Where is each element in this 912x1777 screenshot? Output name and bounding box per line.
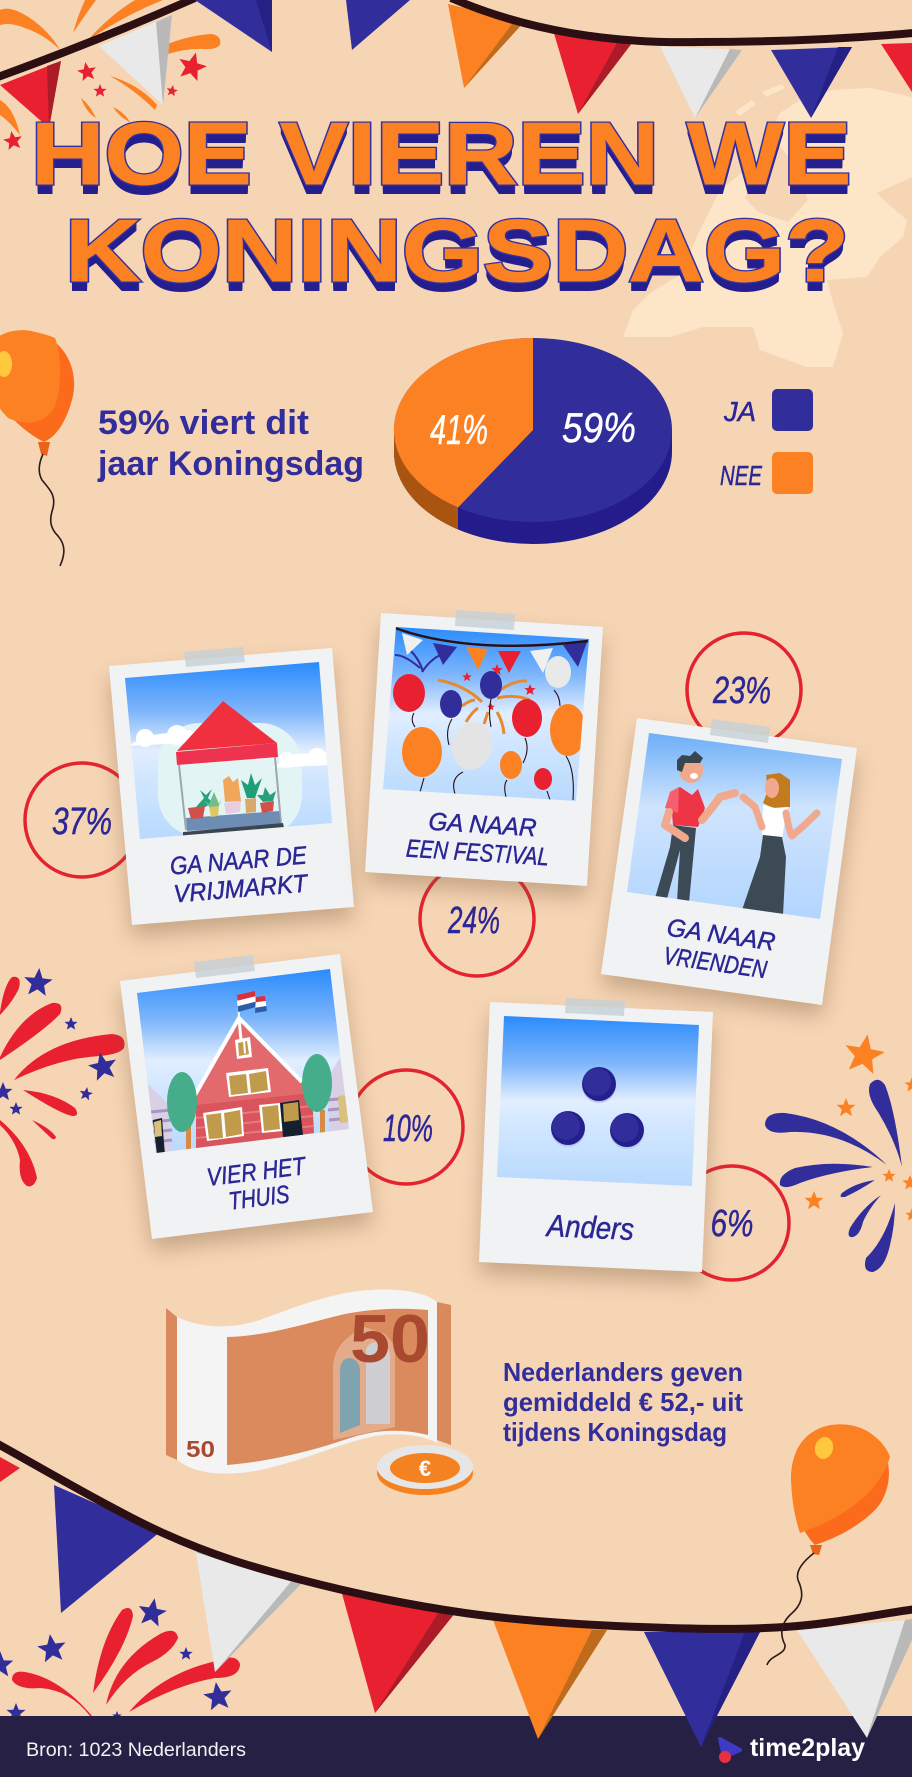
circle: 10% [349, 1070, 463, 1184]
photo: vrienden: GA NAAR [665, 914, 777, 957]
coin [377, 1445, 473, 1495]
circle: 10%: 10% [383, 1108, 433, 1150]
text: 59% viert dit: jaar Koningsdag [97, 445, 364, 483]
balloons and bunting [393, 628, 588, 800]
photo: festival: GA NAAR [428, 808, 537, 842]
circle: 23%: 23% [712, 670, 771, 712]
banknote: 50 euro [166, 1290, 451, 1474]
pie chart [394, 338, 672, 544]
coin: € [419, 1456, 431, 1481]
fireworks: top left [0, 0, 220, 151]
circle: 24% [420, 862, 534, 976]
bunting string [0, 1443, 912, 1629]
circle: 37% [25, 763, 139, 877]
two people talking [655, 751, 817, 915]
banknote: 50 euro: 50 [350, 1301, 430, 1377]
bunting: bottom [0, 1457, 912, 1747]
circle: 6%: 6% [710, 1203, 754, 1245]
circle: 24%: 24% [447, 900, 500, 942]
logo: time2play: time2play [750, 1734, 865, 1762]
title: HOE VIEREN WE [31, 104, 851, 203]
balloon string: right [767, 1553, 814, 1665]
title: KONINGSDAG? [65, 201, 849, 300]
title: KONINGSDAG? [65, 201, 849, 300]
text: 59% viert dit [97, 404, 364, 483]
circle: 37%: 37% [52, 801, 112, 843]
bunting: top [0, 0, 912, 128]
text: gemiddeld bedrag: tijdens Koningsdag [503, 1417, 727, 1447]
fireworks: bottom left [0, 1596, 240, 1721]
market stall [131, 701, 328, 836]
photo: anders: Anders [544, 1208, 635, 1247]
text: gemiddeld bedrag [503, 1357, 743, 1447]
text: gemiddeld bedrag: gemiddeld € 52,- uit [503, 1387, 743, 1417]
balloon: right [791, 1424, 890, 1555]
title: HOE VIEREN WE [31, 104, 851, 203]
three dots [551, 1067, 644, 1149]
legend: NEE [720, 460, 762, 491]
photo: vrienden: VRIENDEN [662, 942, 769, 984]
legend [720, 389, 813, 494]
photo: thuis: THUIS [227, 1180, 291, 1216]
photo: vrijmarkt: GA NAAR DE [169, 841, 308, 881]
banknote: 50 euro: 50 [186, 1436, 215, 1462]
text: 59% viert dit: 59% viert dit [98, 404, 309, 442]
photo: vrijmarkt: VRIJMARKT [172, 869, 310, 908]
fireworks: right [765, 1031, 912, 1272]
title [31, 104, 851, 300]
footer bar: Bron: 1023 Nederlanders [26, 1740, 246, 1761]
fireworks: left [0, 967, 124, 1186]
photo: festival: EEN FESTIVAL [405, 835, 550, 871]
photo: anders [479, 998, 713, 1284]
photo: festival [365, 610, 603, 898]
legend: JA [723, 396, 756, 427]
footer bar [0, 1716, 912, 1777]
map of the Netherlands [623, 84, 912, 367]
text: gemiddeld bedrag: Nederlanders geven [503, 1357, 743, 1387]
circle: 6% [675, 1166, 789, 1280]
photo: thuis [120, 954, 373, 1251]
photo: thuis: VIER HET [205, 1152, 308, 1192]
circle: 23% [687, 633, 801, 747]
balloon: left [0, 330, 74, 566]
pie chart: 59% [562, 404, 636, 451]
photo: vrijmarkt [109, 647, 354, 937]
photo: vrienden [601, 718, 857, 1017]
pie chart: 41% [430, 406, 488, 453]
dutch house [147, 991, 352, 1155]
